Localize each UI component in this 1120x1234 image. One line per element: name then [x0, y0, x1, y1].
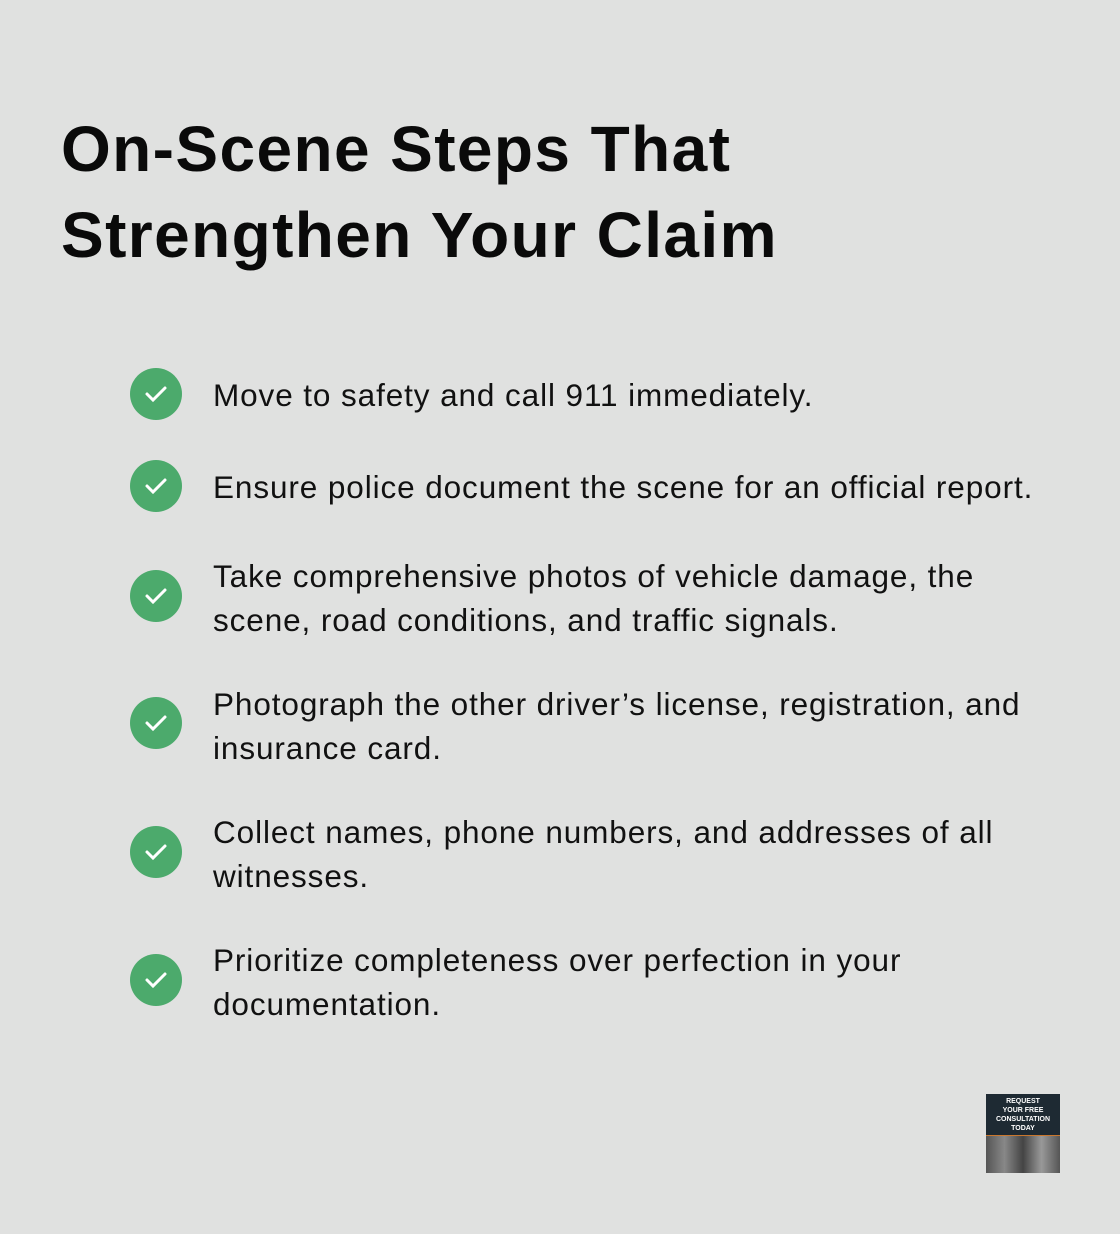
- item 4: Photograph the other driver’s license, registration, and: [213, 686, 1020, 722]
- icon: check: [130, 368, 182, 420]
- title: On-Scene Steps That: [61, 113, 731, 185]
- item 5: Collect names, phone numbers, and addresses of all: [213, 814, 993, 850]
- item 2: Ensure police document the scene for an official report.: [213, 469, 1033, 505]
- item 6: [130, 942, 901, 1022]
- title: Strengthen Your Claim: [61, 199, 778, 271]
- item 3: Take comprehensive photos of vehicle damage, the: [213, 558, 974, 594]
- item 1: [130, 368, 813, 420]
- item 3: scene, road conditions, and traffic signals.: [213, 602, 839, 638]
- title: [61, 113, 778, 271]
- item 1: Move to safety and call 911 immediately.: [213, 377, 813, 413]
- item 2: [130, 460, 1033, 512]
- item 5: witnesses.: [213, 858, 369, 894]
- item 6: Prioritize completeness over perfection in your: [213, 942, 901, 978]
- icon: check: [130, 460, 182, 512]
- icon: check: [130, 697, 182, 749]
- item 6: documentation.: [213, 986, 441, 1022]
- item 5: [130, 814, 993, 894]
- icon: check: [130, 826, 182, 878]
- icon: check: [130, 954, 182, 1006]
- logo: consultation badge: CONSULTATION: [996, 1116, 1050, 1123]
- item 4: [130, 686, 1020, 766]
- logo: consultation badge: TODAY: [1011, 1125, 1035, 1132]
- logo: consultation badge: REQUEST: [1006, 1098, 1040, 1105]
- item 3: [130, 558, 974, 638]
- logo: consultation badge: YOUR FREE: [1003, 1107, 1043, 1114]
- icon: check: [130, 570, 182, 622]
- item 4: insurance card.: [213, 730, 442, 766]
- logo: consultation badge: [986, 1094, 1060, 1173]
